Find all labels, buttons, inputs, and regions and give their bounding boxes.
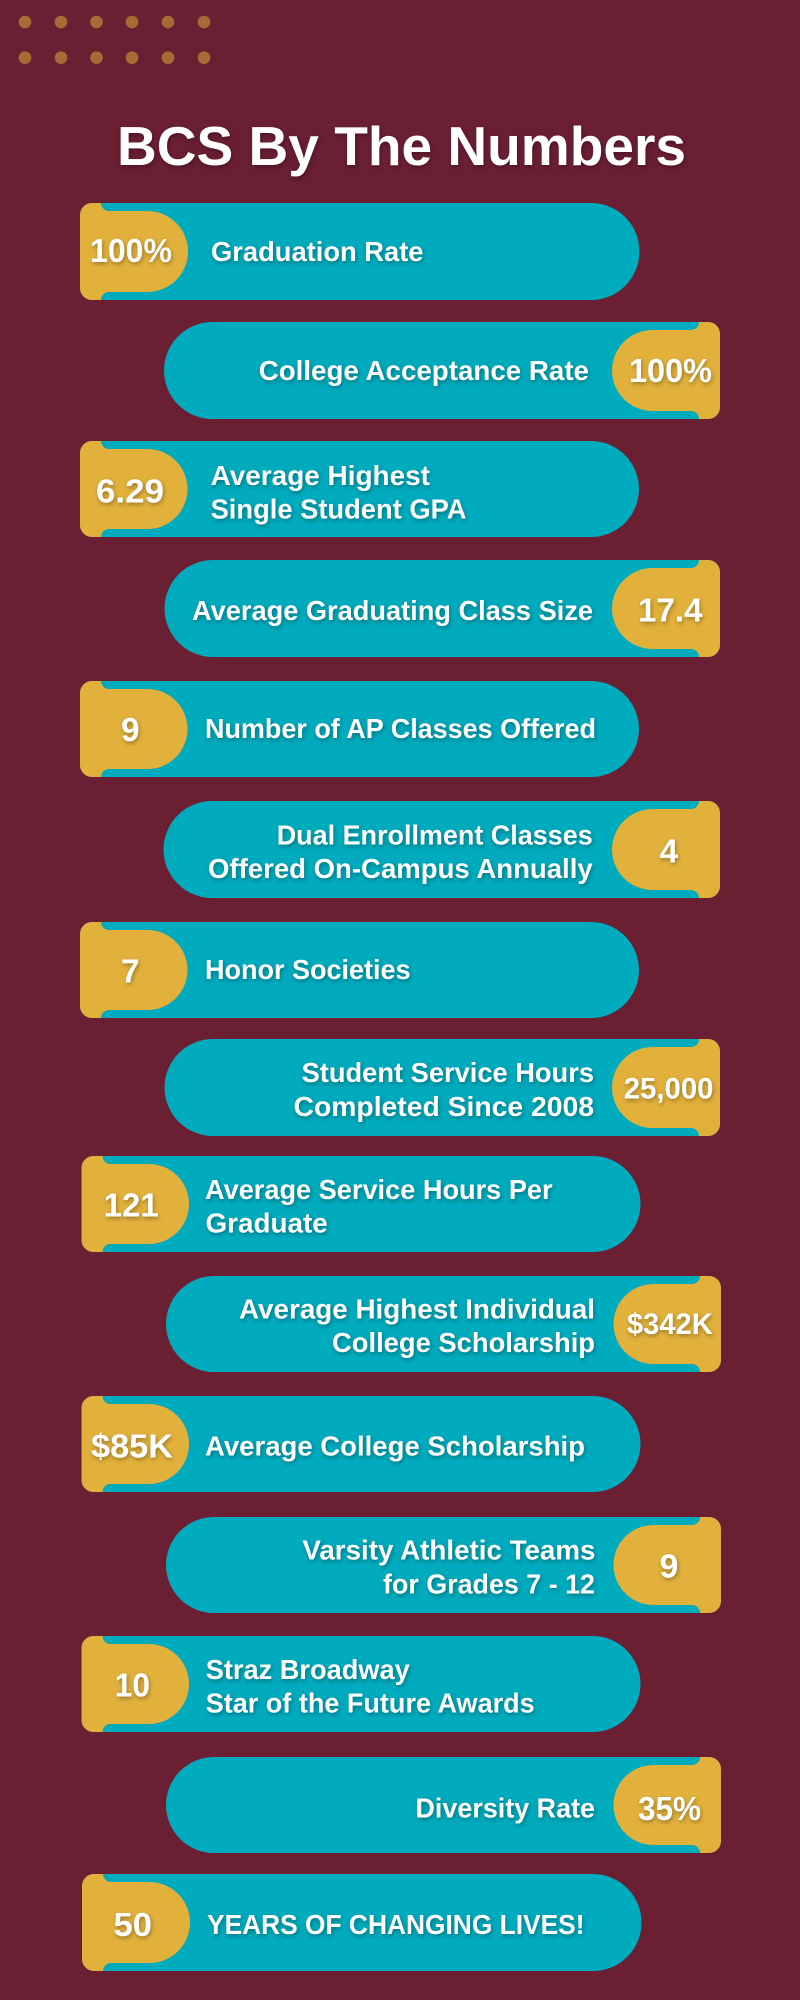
pill bbox=[166, 1517, 721, 1613]
label: Dual Enrollment Classes bbox=[277, 820, 593, 851]
value: 35% bbox=[638, 1790, 701, 1827]
label bbox=[302, 1535, 596, 1600]
row: honor societies bbox=[80, 922, 639, 1018]
value: $85K bbox=[91, 1428, 173, 1465]
row: dual enrollment classes bbox=[164, 801, 720, 898]
value: 9 bbox=[660, 1548, 678, 1585]
label: College Scholarship bbox=[332, 1327, 595, 1358]
label: Average Highest Individual bbox=[239, 1294, 595, 1325]
badge bbox=[614, 1276, 721, 1372]
value: 17.4 bbox=[638, 592, 703, 629]
badge bbox=[614, 1757, 721, 1853]
row: diversity rate bbox=[166, 1757, 721, 1853]
badge bbox=[80, 203, 188, 300]
label bbox=[206, 1654, 535, 1719]
badge bbox=[612, 322, 720, 419]
value: 6.29 bbox=[96, 473, 164, 510]
row: average service hours bbox=[82, 1156, 640, 1252]
pill bbox=[82, 1396, 640, 1492]
pill bbox=[164, 322, 720, 419]
badge bbox=[82, 1396, 189, 1492]
value: 25,000 bbox=[624, 1072, 714, 1105]
row: college acceptance rate bbox=[164, 322, 720, 419]
value: 100% bbox=[90, 232, 172, 269]
label: Offered On-Campus Annually bbox=[208, 853, 593, 884]
pill bbox=[166, 1276, 721, 1372]
row: straz broadway awards bbox=[82, 1636, 640, 1732]
label bbox=[205, 1174, 553, 1239]
row: average highest GPA bbox=[80, 441, 639, 537]
pill bbox=[80, 681, 639, 777]
row: graduation rate bbox=[80, 203, 639, 300]
pill bbox=[80, 441, 639, 537]
label: Number of AP Classes Offered bbox=[205, 713, 596, 744]
badge bbox=[80, 441, 188, 537]
label bbox=[211, 460, 466, 525]
pill bbox=[82, 1874, 641, 1971]
label: Graduate bbox=[206, 1208, 328, 1239]
pill bbox=[82, 1156, 640, 1252]
pill bbox=[165, 560, 720, 657]
badge bbox=[82, 1636, 189, 1732]
label: Graduation Rate bbox=[211, 236, 424, 267]
value: 4 bbox=[660, 833, 679, 870]
value: $342K bbox=[627, 1308, 713, 1341]
label: Completed Since 2008 bbox=[294, 1091, 594, 1122]
label: Average College Scholarship bbox=[205, 1431, 585, 1462]
label: Average Service Hours Per bbox=[205, 1174, 553, 1205]
label: Straz Broadway bbox=[206, 1654, 410, 1685]
label: for Grades 7 - 12 bbox=[383, 1569, 595, 1600]
value: 10 bbox=[115, 1667, 150, 1704]
pill bbox=[80, 922, 639, 1018]
label: Star of the Future Awards bbox=[206, 1688, 535, 1719]
row: highest individual scholarship bbox=[166, 1276, 721, 1372]
badge bbox=[80, 681, 188, 777]
label: Single Student GPA bbox=[211, 494, 466, 525]
badge bbox=[612, 560, 720, 657]
label: Honor Societies bbox=[205, 954, 411, 985]
row: varsity athletic teams bbox=[166, 1517, 721, 1613]
pill bbox=[165, 1039, 720, 1136]
badge bbox=[80, 922, 188, 1018]
badge bbox=[614, 1517, 721, 1613]
label bbox=[294, 1057, 594, 1122]
badge bbox=[612, 801, 720, 898]
value: 50 bbox=[114, 1906, 152, 1943]
badge bbox=[612, 1039, 720, 1136]
value: 9 bbox=[121, 711, 140, 748]
row: AP classes bbox=[80, 681, 639, 777]
label: College Acceptance Rate bbox=[259, 355, 589, 386]
label: Average Highest bbox=[211, 460, 430, 491]
pill bbox=[82, 1636, 640, 1732]
value: 121 bbox=[104, 1187, 159, 1224]
label: Diversity Rate bbox=[416, 1793, 595, 1824]
row: 50 years of changing lives bbox=[82, 1874, 641, 1971]
pill bbox=[80, 203, 639, 300]
row: average graduating class size bbox=[165, 560, 720, 657]
label: YEARS OF CHANGING LIVES! bbox=[207, 1909, 584, 1940]
pill bbox=[166, 1757, 721, 1853]
row: student service hours bbox=[165, 1039, 720, 1136]
label: Student Service Hours bbox=[302, 1057, 594, 1088]
label bbox=[208, 820, 593, 884]
label: Varsity Athletic Teams bbox=[302, 1535, 596, 1566]
label bbox=[239, 1294, 595, 1358]
badge bbox=[82, 1874, 190, 1971]
decorative dot grid bbox=[19, 16, 210, 64]
pill bbox=[164, 801, 720, 898]
value: 100% bbox=[629, 352, 712, 389]
row: average college scholarship bbox=[82, 1396, 640, 1492]
value: 7 bbox=[121, 953, 140, 990]
label: Average Graduating Class Size bbox=[192, 595, 593, 626]
badge bbox=[82, 1156, 189, 1252]
title: BCS By The Numbers bbox=[117, 115, 686, 177]
